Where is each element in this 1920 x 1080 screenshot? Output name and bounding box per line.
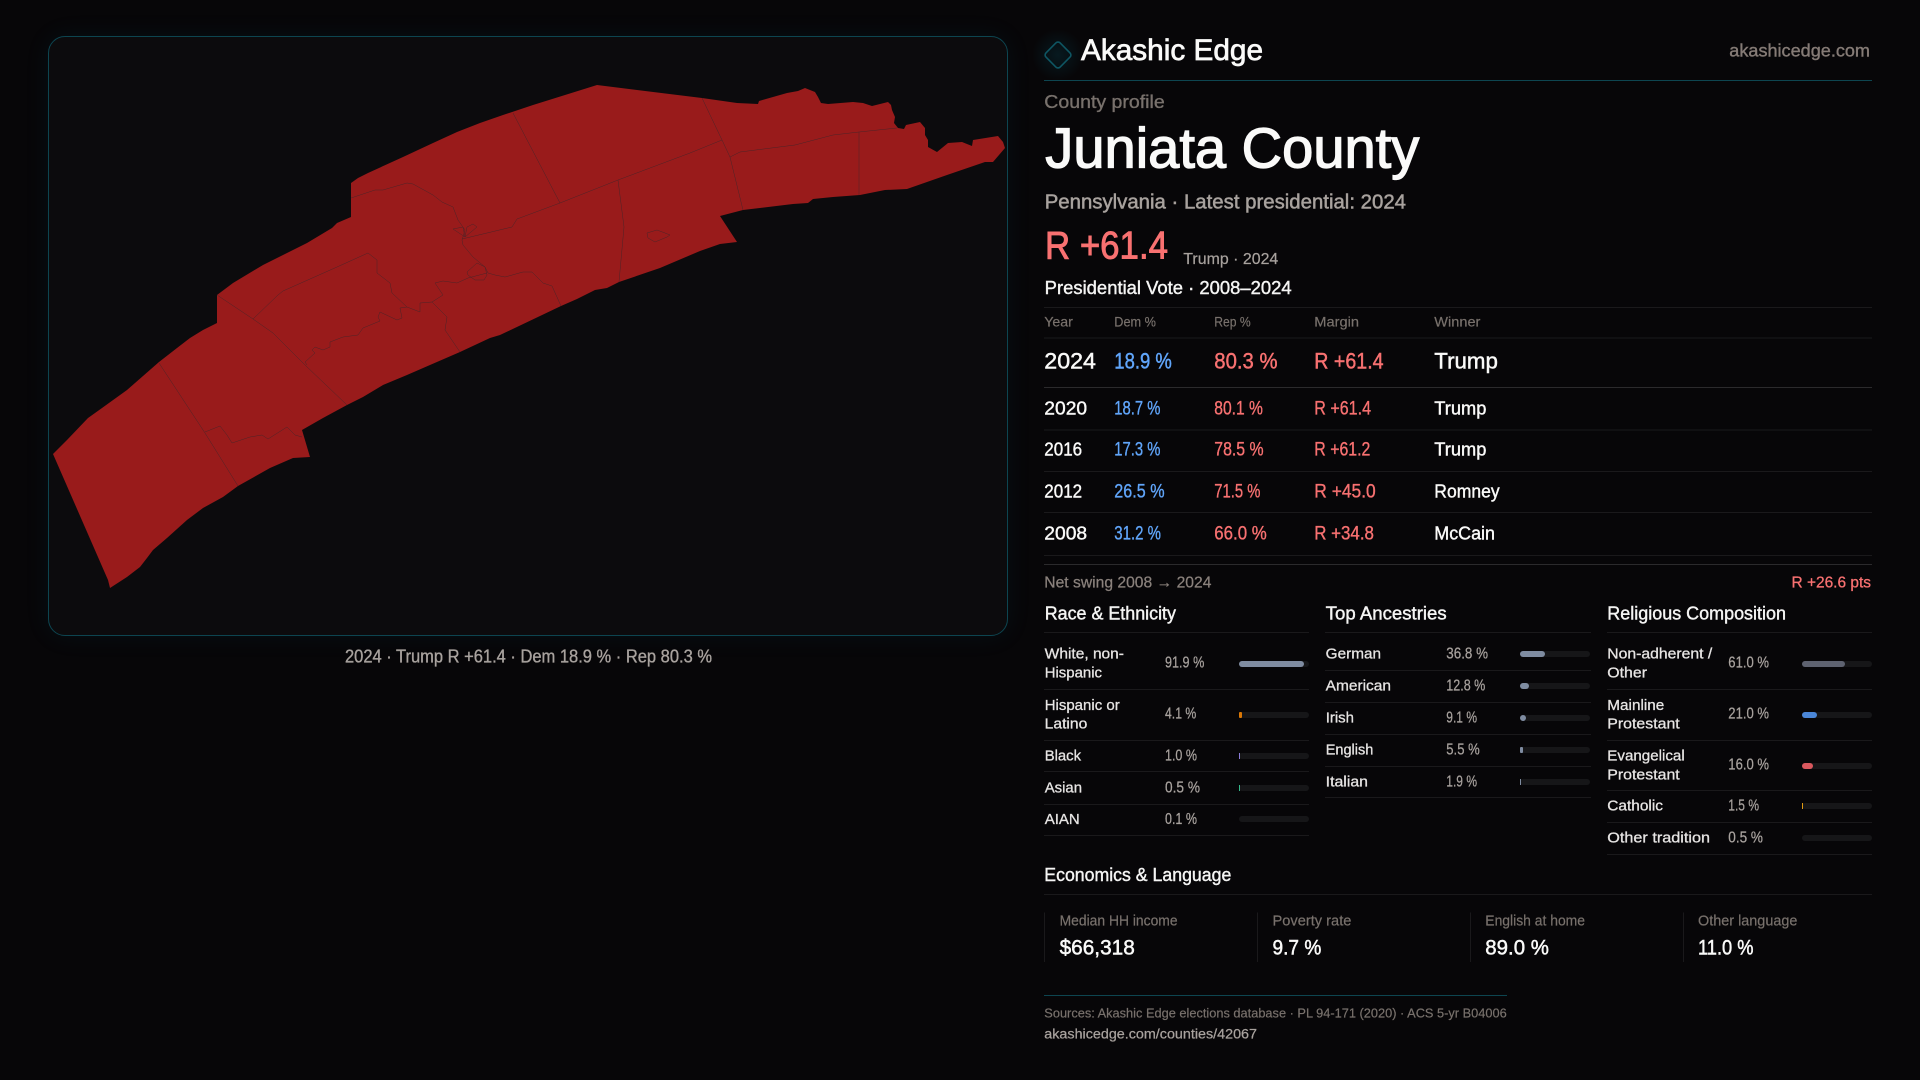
stat: other language: Other language [1698,914,1797,930]
title: Juniata County [1045,117,1420,181]
table header row: Rep % [1214,314,1251,330]
row 2024: R +61.4 [1314,349,1384,374]
county shape [53,85,1005,588]
row: hispanic: Hispanic or [1045,697,1120,714]
eyebrow: County profile [1044,91,1165,112]
panel: top ancestries [1325,603,1591,798]
row: german: German [1326,645,1381,662]
row 2008: McCain [1434,522,1495,543]
row: american: 12.8 % [1446,678,1485,695]
row 2008: 2008 [1044,522,1087,543]
row 2020: R +61.4 [1314,399,1371,420]
row: black [1045,748,1309,765]
row 2008: 31.2 % [1114,523,1161,544]
row 2020: 2020 [1044,398,1087,419]
row 2024: Trump [1434,349,1498,374]
row: other tradition: 0.5 % [1728,830,1763,847]
row: catholic [1607,798,1872,815]
subtitle: Pennsylvania · Latest presidential: 2024 [1045,190,1406,213]
footer sources [1044,1006,1507,1041]
stat: poverty: Poverty rate [1272,914,1351,930]
row 2024 [1044,349,1498,374]
table header row: Year [1044,314,1073,330]
table header row: Dem % [1114,314,1156,330]
row: aian: AIAN [1045,811,1080,828]
headline winner: Trump · 2024 [1183,251,1278,268]
stat: median income [1044,912,1178,962]
row: english [1326,742,1590,759]
row: other tradition: Other tradition [1607,830,1710,847]
headline margin: R +61.4 [1045,225,1168,268]
row: german [1326,645,1590,662]
row 2024: 80.3 % [1214,349,1278,374]
row: catholic: Catholic [1607,798,1663,815]
row: black: 1.0 % [1165,748,1197,765]
row: black: Black [1045,748,1081,765]
row: irish: Irish [1326,710,1354,727]
row: white: Hispanic [1045,664,1102,681]
row 2016: 78.5 % [1214,440,1264,461]
row: evangelical [1607,748,1872,783]
footer sources: akashicedge.com/counties/42067 [1044,1026,1257,1041]
row: american: American [1326,678,1391,695]
row: italian [1326,774,1590,791]
row: asian: 0.5 % [1165,780,1200,797]
row: non-adherent: 61.0 % [1728,654,1769,671]
panel: economics and language [1044,865,1872,962]
heading: Top Ancestries [1326,603,1447,623]
row: white: White, non- [1045,645,1124,662]
row: non-adherent: Non-adherent / [1607,645,1713,662]
row: german: 36.8 % [1446,645,1488,662]
site url: akashicedge.com [1729,41,1870,61]
map caption: 2024 · Trump R +61.4 · Dem 18.9 % · Rep 80.3 % [345,647,712,667]
row: aian [1045,811,1309,828]
net swing [1044,574,1871,591]
row: hispanic: 4.1 % [1165,706,1196,723]
net swing: Net swing 2008 → 2024 [1044,574,1212,591]
row: asian: Asian [1045,780,1082,797]
table header row [1044,314,1481,330]
row 2016: R +61.2 [1314,440,1370,461]
row: asian [1045,780,1309,797]
stat: poverty [1258,912,1351,962]
row 2012: Romney [1434,480,1500,501]
row 2016: 17.3 % [1114,440,1160,461]
heading: Economics & Language [1044,865,1231,885]
internal boundaries [159,98,897,486]
table heading: Presidential Vote · 2008–2024 [1045,278,1292,298]
row 2008: 66.0 % [1214,523,1267,544]
stat: other language: 11.0 % [1698,936,1754,959]
row 2016 [1044,439,1486,461]
stat: english: English at home [1485,914,1585,930]
row: white: 91.9 % [1165,654,1204,671]
stat: median income: Median HH income [1060,914,1178,930]
row 2020: Trump [1434,398,1486,419]
row: mainline [1607,697,1872,732]
panel: religious composition [1607,603,1872,854]
row: mainline: Mainline [1607,697,1664,714]
row 2016: 2016 [1044,439,1082,460]
row: evangelical: 16.0 % [1728,756,1769,773]
row 2012 [1044,480,1500,502]
stat: english: 89.0 % [1485,936,1549,959]
row 2012: 26.5 % [1114,481,1165,502]
row: american [1326,678,1590,695]
brand header [1032,29,1870,81]
row 2024: 18.9 % [1114,349,1172,374]
row 2008: R +34.8 [1314,523,1374,544]
row: hispanic: Latino [1045,715,1087,732]
row 2020: 18.7 % [1114,399,1160,420]
heading: Religious Composition [1607,603,1786,623]
icon: diamond logo [1032,29,1084,81]
table header row: Winner [1434,314,1481,330]
footer sources: Sources: Akashic Edge elections database · PL 94-171 (2020) · ACS 5-yr B04006 [1044,1006,1507,1021]
row: catholic: 1.5 % [1728,798,1759,815]
row: non-adherent: Other [1607,664,1647,681]
stat: english [1470,912,1585,962]
row: irish [1326,710,1590,727]
row: irish: 9.1 % [1446,710,1477,727]
row: english: 5.5 % [1446,742,1480,759]
row 2024: 2024 [1044,349,1096,374]
row: italian: 1.9 % [1446,774,1477,791]
panel: race and ethnicity [1044,603,1309,836]
row 2012: 2012 [1044,480,1082,501]
row: white [1045,645,1309,681]
row: aian: 0.1 % [1165,811,1197,828]
table: presidential vote [1044,278,1872,556]
row 2012: R +45.0 [1314,481,1376,502]
map: Juniata County subdivisions [53,85,1005,588]
row 2020: 80.1 % [1214,399,1263,420]
row 2016: Trump [1434,439,1486,460]
brand name: Akashic Edge [1081,34,1263,67]
row: mainline: 21.0 % [1728,706,1769,723]
row 2008 [1044,522,1495,544]
row 2020 [1044,398,1486,420]
row: hispanic [1045,697,1309,732]
row 2012: 71.5 % [1214,481,1260,502]
stat: other language [1684,912,1797,962]
heading: Race & Ethnicity [1045,603,1176,623]
row: evangelical: Protestant [1607,766,1681,783]
row: mainline: Protestant [1607,715,1681,732]
row: evangelical: Evangelical [1607,748,1685,765]
row: italian: Italian [1326,774,1368,791]
row: english: English [1326,742,1373,759]
stat: poverty: 9.7 % [1272,936,1321,959]
row: non-adherent [1607,645,1872,681]
net swing: R +26.6 pts [1792,574,1871,591]
panel: map frame [48,36,1008,636]
row: other tradition [1607,830,1872,847]
stat: median income: $66,318 [1060,936,1135,959]
table header row: Margin [1314,314,1359,330]
